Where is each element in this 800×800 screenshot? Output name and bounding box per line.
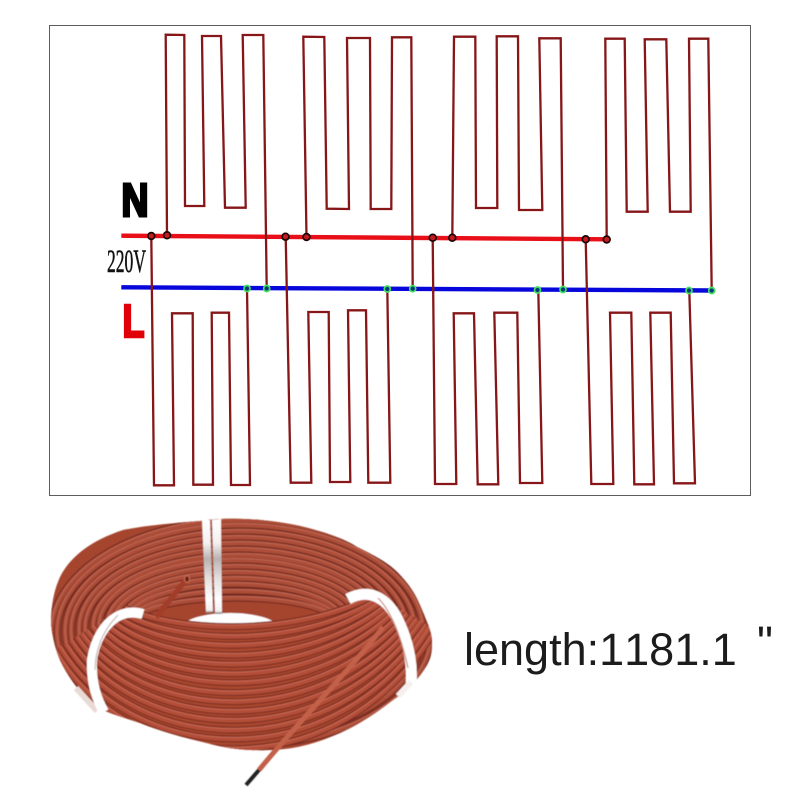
label: N: N (122, 174, 148, 226)
photo: coil of heating wire (40, 510, 440, 785)
strap: left tie (76, 613, 143, 712)
heating loops: upper row (166, 35, 712, 291)
length label: length:1181.1 (464, 624, 737, 675)
neutral bus: blue L line (121, 287, 712, 290)
back strands of coil (51, 519, 431, 746)
label: L: L (122, 295, 144, 347)
length label: " (757, 617, 773, 668)
panel: wiring diagram (50, 26, 750, 496)
connection nodes on blue line (244, 286, 715, 294)
wire end: upper (156, 576, 190, 617)
connection nodes on red line (148, 232, 610, 243)
coil body (50, 518, 433, 752)
strap: right tie (348, 594, 411, 696)
panel frame (50, 26, 750, 496)
heating loops: lower row (151, 236, 695, 485)
live bus: red N line (121, 236, 607, 239)
label: 220V: 220V (107, 244, 146, 280)
wire end: lower lead (246, 627, 383, 785)
front strands of coil (55, 594, 435, 749)
strap: centre tie (202, 519, 222, 614)
centre hole (188, 612, 273, 624)
